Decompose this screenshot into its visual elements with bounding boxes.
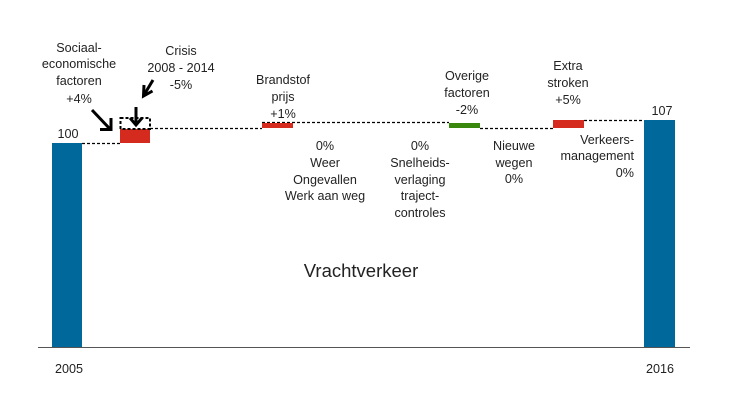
label: sociaal-economische factoren: economische [42,57,116,71]
label: weer ongevallen werk aan weg: Ongevallen [293,173,357,187]
bar: brandstof prijs [262,123,293,128]
label: year 2016: 2016 [646,362,674,376]
label: weer ongevallen werk aan weg: Werk aan weg [285,189,365,203]
label: year 2005: 2005 [55,362,83,376]
label: crisis: -5% [170,78,192,92]
label: overige factoren: factoren [444,86,490,100]
label: extra stroken: stroken [547,76,589,90]
label: overige factoren: Overige [445,69,489,83]
label: verkeersmanagement: management [560,149,634,163]
bar: 2005 [52,143,82,347]
label: nieuwe wegen: 0% [505,172,523,186]
label: nieuwe wegen: wegen [494,156,533,170]
label: snelheidsverlaging trajectcontroles: 0% [411,139,429,153]
label: value 100: 100 [57,127,79,141]
label: value 107: 107 [651,104,673,118]
dashed box: crisis [120,118,150,129]
label: sociaal-economische factoren: +4% [66,92,92,106]
label: weer ongevallen werk aan weg: 0% [316,139,334,153]
label: snelheidsverlaging trajectcontroles: traject- [401,189,439,203]
label: brandstof prijs: +1% [270,107,296,121]
label: nieuwe wegen: Nieuwe [493,139,535,153]
bar: 2016 [644,120,675,347]
label: sociaal-economische factoren: Sociaal- [56,41,102,55]
arrow: crisis diagonal [144,80,153,96]
label: crisis: Crisis [165,44,197,58]
label: weer ongevallen werk aan weg: Weer [310,156,340,170]
label: snelheidsverlaging trajectcontroles: controles [394,206,446,220]
arrow: sociaal-economische factoren [92,110,111,130]
label: crisis: 2008 - 2014 [147,61,215,75]
label: snelheidsverlaging trajectcontroles: verlaging [394,173,446,187]
bar: overige factoren [449,123,480,128]
label: brandstof prijs: prijs [271,90,295,104]
x axis [38,347,690,348]
label: extra stroken: Extra [553,59,583,73]
label: snelheidsverlaging trajectcontroles: Snelheids- [390,156,450,170]
label: verkeersmanagement: Verkeers- [580,133,634,147]
bar: extra stroken [553,120,584,128]
label: sociaal-economische factoren: factoren [56,74,102,88]
label: brandstof prijs: Brandstof [256,73,310,87]
label: extra stroken: +5% [555,93,581,107]
label: verkeersmanagement: 0% [616,166,634,180]
heading: Vrachtverkeer: Vrachtverkeer [304,260,418,281]
arrow: crisis down [130,107,142,125]
label: overige factoren: -2% [456,103,478,117]
bar: sociaal-economische factoren [120,129,150,143]
